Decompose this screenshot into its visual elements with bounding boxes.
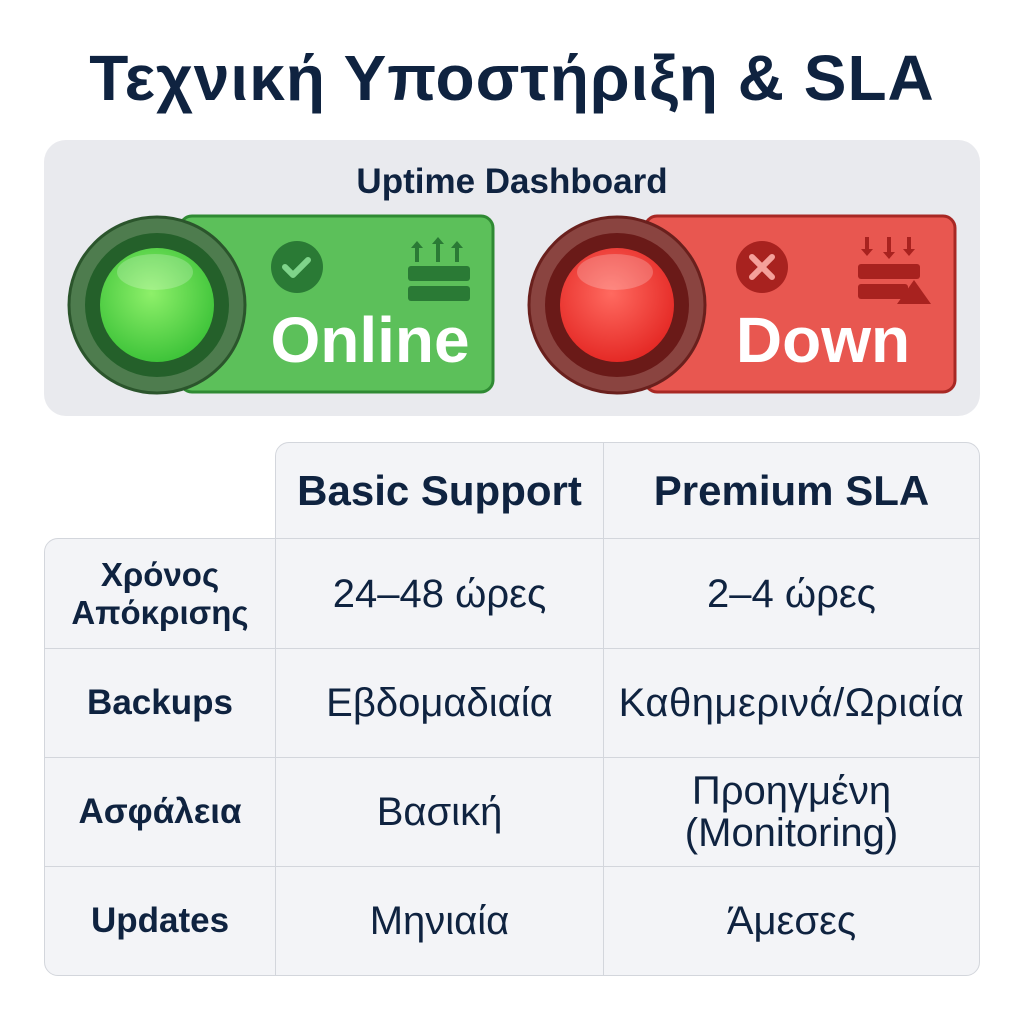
comparison table: 2–4 ώρες xyxy=(707,572,876,616)
header: premium sla xyxy=(603,442,980,539)
label: Down: Down xyxy=(736,304,910,376)
dashboard heading: Uptime Dashboard xyxy=(356,162,668,201)
row: response time: Χρόνος xyxy=(101,556,219,592)
row: security: Ασφάλεια xyxy=(78,792,242,831)
comparison table: (Monitoring) xyxy=(685,811,898,855)
comparison table: Βασική xyxy=(377,790,502,834)
comparison table: Καθημερινά/Ωριαία xyxy=(619,681,964,725)
header: basic support: Basic Support xyxy=(297,466,582,514)
title: Τεχνική Υποστήριξη & SLA xyxy=(89,42,935,114)
comparison table: Μηνιαία xyxy=(370,899,509,943)
row: security xyxy=(44,757,276,867)
row: backups: Backups xyxy=(87,683,233,722)
status: online xyxy=(68,214,494,394)
comparison table: 24–48 ώρες xyxy=(333,572,546,616)
panel: uptime dashboard xyxy=(44,140,980,416)
label: Online: Online xyxy=(270,304,470,376)
comparison table: Προηγμένη xyxy=(692,769,891,813)
comparison table: Άμεσες xyxy=(727,899,856,943)
header: basic support xyxy=(275,442,604,539)
header: premium sla: Premium SLA xyxy=(654,466,929,514)
row: backups xyxy=(44,648,276,758)
icon: server down xyxy=(858,237,931,304)
row: updates: Updates xyxy=(91,901,229,940)
icon: server up xyxy=(408,237,470,301)
row: response time: Απόκρισης xyxy=(71,594,249,630)
icon: x xyxy=(736,241,788,293)
status: down xyxy=(528,214,956,394)
row: updates xyxy=(44,866,276,976)
icon: check xyxy=(271,241,323,293)
comparison table: Εβδομαδιαία xyxy=(326,681,553,725)
row: response time xyxy=(44,538,276,649)
